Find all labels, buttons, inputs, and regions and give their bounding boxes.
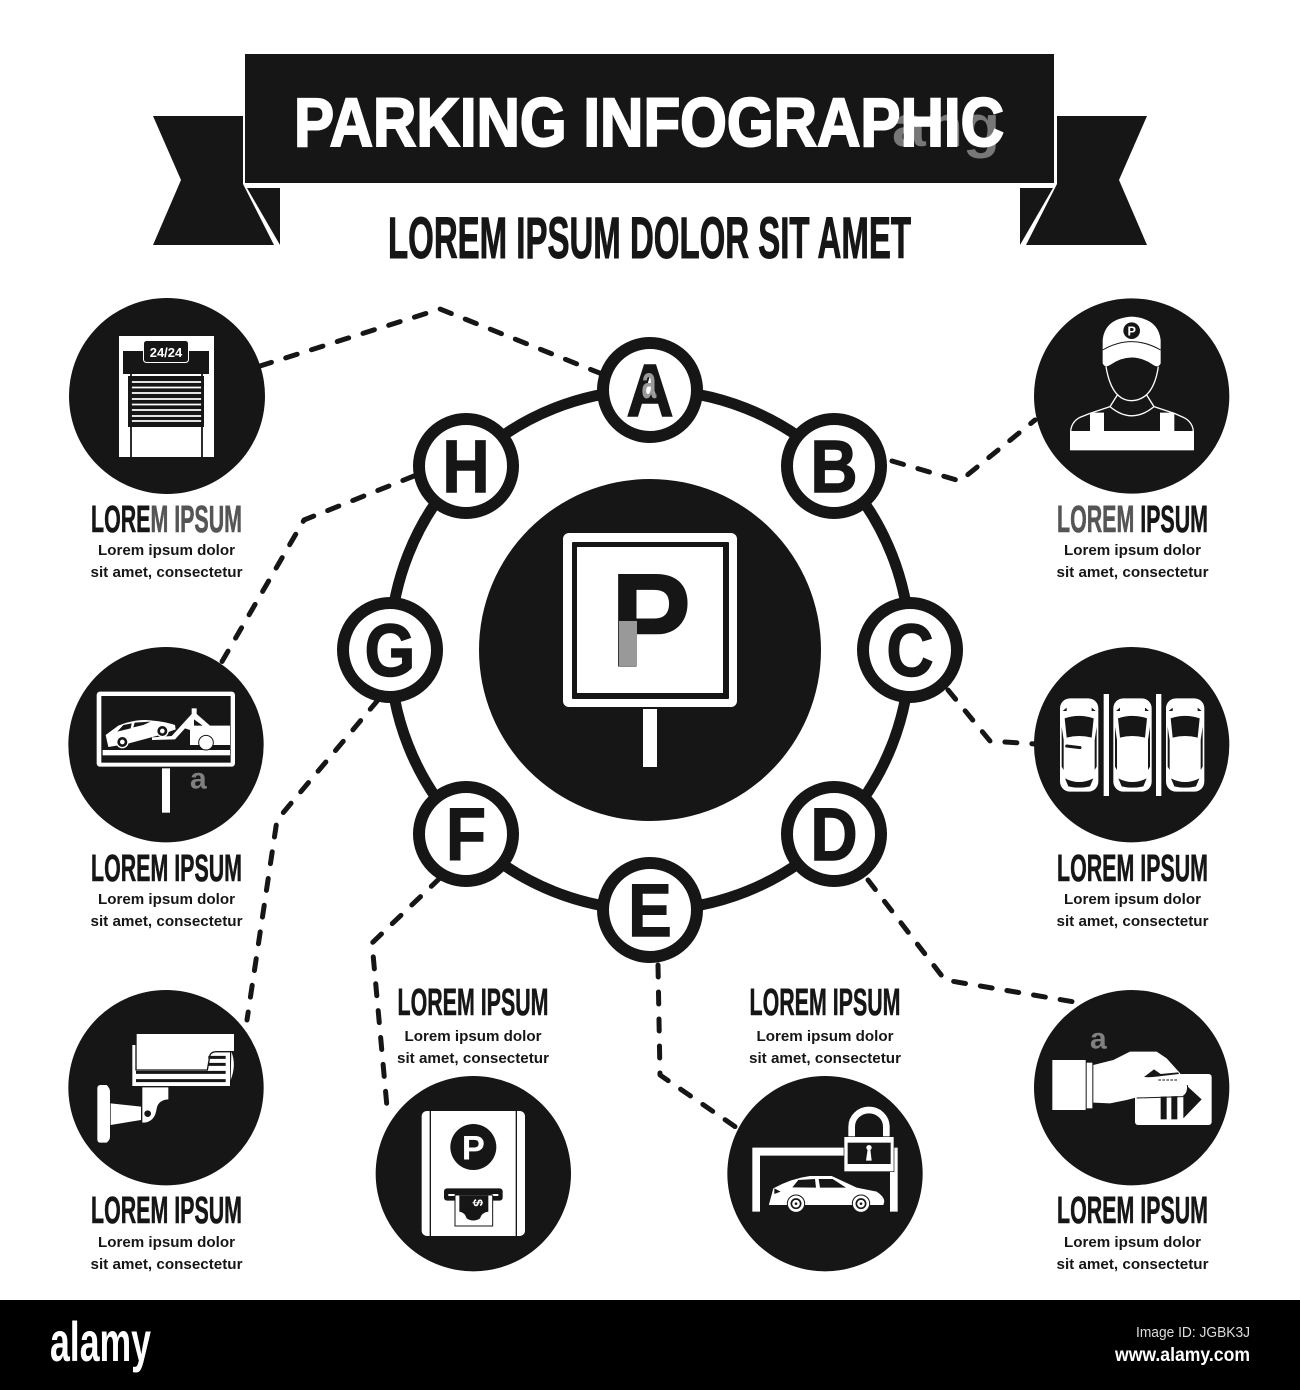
- label: top left: Lorem ipsum dolor: [98, 543, 235, 559]
- node B: [787, 419, 881, 513]
- label: middle right: Lorem ipsum dolor: [1064, 892, 1201, 908]
- node G: [343, 603, 437, 697]
- connector A: [260, 309, 602, 374]
- label: middle left: Lorem ipsum dolor: [98, 892, 235, 908]
- title watermark: ang: [892, 94, 1000, 159]
- connector B: [892, 420, 1035, 481]
- label: top right: Lorem ipsum dolor: [1064, 543, 1201, 559]
- node F: F: [446, 793, 486, 876]
- label: middle left: LOREM IPSUM: [91, 848, 242, 890]
- label: F: sit amet, consectetur: [397, 1051, 549, 1067]
- central disc: [479, 479, 821, 821]
- title: PARKING INFOGRAPHIC: [294, 84, 1004, 161]
- connector D: [868, 880, 1110, 1008]
- icon: tow away sign: [68, 647, 264, 842]
- label: middle right: [1056, 848, 1209, 930]
- title banner: [153, 54, 1147, 245]
- label: E: [749, 982, 901, 1067]
- subtitle: LOREM IPSUM DOLOR SIT AMET: [388, 206, 911, 271]
- label: top right: [1056, 499, 1209, 581]
- label: bottom left: sit amet, consectetur: [90, 1257, 243, 1273]
- label: bottom left: [90, 1190, 243, 1273]
- node D: [787, 787, 881, 881]
- car 2: [1113, 698, 1152, 792]
- node A: A: [626, 349, 674, 432]
- label: top right: LOREM IPSUM: [1057, 499, 1208, 541]
- label: E: Lorem ipsum dolor: [756, 1029, 894, 1045]
- connector G: [247, 700, 378, 1020]
- label: F: Lorem ipsum dolor: [404, 1029, 542, 1045]
- banner left tail: [153, 116, 280, 245]
- label: middle left: [90, 848, 243, 930]
- footer logo: alamy: [50, 1310, 151, 1373]
- node H: H: [442, 425, 490, 508]
- label: bottom left: LOREM IPSUM: [91, 1190, 242, 1232]
- footer image id: Image ID: JGBK3J: [1136, 1324, 1250, 1341]
- icon: parking meter: $: [470, 1199, 485, 1207]
- node D: D: [810, 793, 858, 876]
- label: middle left: sit amet, consectetur: [90, 914, 243, 930]
- node B: B: [810, 425, 858, 508]
- icon: parked cars: [1034, 647, 1229, 842]
- icon: parking meter: P: [462, 1129, 485, 1167]
- footer bar: [0, 1300, 1300, 1390]
- label: top left: [90, 499, 243, 581]
- banner right tail: [1020, 116, 1147, 245]
- hub ring: [390, 390, 910, 910]
- node F: [419, 787, 513, 881]
- icon: parking meter: [376, 1076, 571, 1271]
- parking sign: P: [610, 546, 691, 694]
- label: F: [397, 982, 549, 1067]
- banner main ribbon: [245, 54, 1054, 183]
- node H: [419, 419, 513, 513]
- label: E: LOREM IPSUM: [750, 982, 900, 1024]
- icon: locked garage: [727, 1076, 923, 1271]
- connector E: [658, 965, 740, 1130]
- label: bottom right: sit amet, consectetur: [1056, 1257, 1209, 1273]
- label: top left: sit amet, consectetur: [90, 565, 243, 581]
- label: F: LOREM IPSUM: [398, 982, 548, 1024]
- node A: a: [642, 356, 657, 408]
- label: bottom right: Lorem ipsum dolor: [1064, 1235, 1201, 1251]
- label: middle right: sit amet, consectetur: [1056, 914, 1209, 930]
- connector H: [220, 476, 414, 665]
- node A: [603, 343, 697, 437]
- node E: E: [628, 869, 672, 952]
- icon: security camera: [68, 990, 264, 1185]
- label: top left: LOREM IPSUM: [91, 499, 242, 541]
- car 1: [1060, 698, 1098, 792]
- connector F: [372, 878, 440, 1118]
- parking sign: [563, 533, 737, 767]
- icon: parking attendant: [1034, 298, 1229, 494]
- icon: tow away sign: a: [190, 762, 207, 795]
- node C: C: [886, 609, 934, 692]
- label: bottom left: Lorem ipsum dolor: [98, 1235, 235, 1251]
- label: E: sit amet, consectetur: [749, 1051, 901, 1067]
- node G: G: [365, 609, 415, 692]
- icon: hand with parking ticket: [1034, 990, 1229, 1185]
- label: bottom right: [1056, 1190, 1209, 1273]
- node E: [603, 863, 697, 957]
- icon: 24/24 garage: 24/24: [150, 345, 183, 360]
- central hub diagram: [343, 343, 957, 957]
- icon: 24/24 garage: [69, 298, 265, 494]
- icon: hand with parking ticket: a: [1090, 1023, 1107, 1056]
- label: top right: sit amet, consectetur: [1056, 565, 1209, 581]
- connector C: [948, 690, 1035, 744]
- icon: parking attendant: P: [1127, 324, 1136, 338]
- footer url: www.alamy.com: [1114, 1345, 1250, 1366]
- car 3: [1166, 698, 1204, 792]
- node C: [863, 603, 957, 697]
